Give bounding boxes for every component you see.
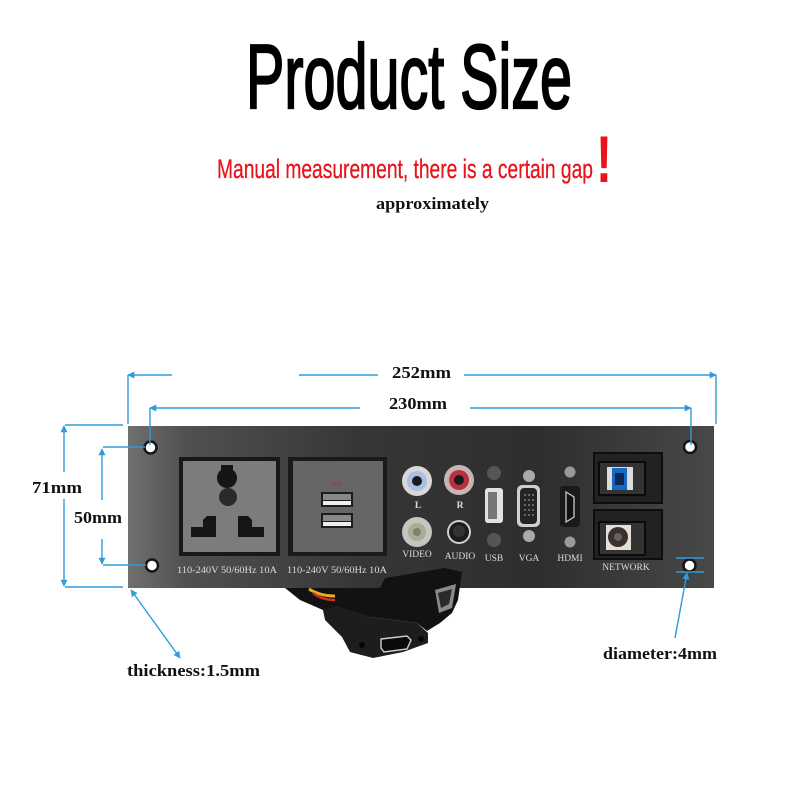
HDMI port bbox=[560, 466, 580, 548]
port labels: VGA bbox=[519, 554, 539, 564]
audio jack bbox=[447, 520, 471, 544]
approximately note: approximately bbox=[376, 194, 490, 213]
RCA audio left bbox=[402, 466, 432, 496]
port labels: HDMI bbox=[557, 554, 583, 564]
port labels: R bbox=[457, 501, 464, 511]
port labels: L bbox=[415, 501, 421, 511]
port labels: AUDIO bbox=[445, 552, 475, 562]
subtitle warning bbox=[217, 122, 612, 196]
port labels bbox=[402, 501, 650, 573]
dimension: hole diameter bbox=[603, 558, 717, 663]
dimension: thickness bbox=[127, 590, 260, 680]
dimension: 71mm height: 71mm bbox=[32, 478, 82, 497]
subtitle warning: ! bbox=[596, 122, 612, 196]
USB port bbox=[485, 466, 503, 547]
dimension: hole diameter: diameter:4mm bbox=[603, 644, 717, 663]
port labels: VIDEO bbox=[402, 550, 432, 560]
universal power socket bbox=[179, 457, 280, 556]
socket voltage labels: 110-240V 50/60Hz 10A bbox=[177, 566, 277, 576]
USB charging module bbox=[288, 457, 387, 556]
socket voltage labels bbox=[177, 566, 387, 576]
dimension: 50mm hole height: 50mm bbox=[74, 508, 122, 527]
dimension: 230mm hole spacing: 230mm bbox=[389, 394, 447, 413]
dimension: 252mm width: 252mm bbox=[392, 363, 451, 382]
RCA audio right bbox=[444, 465, 474, 495]
panel: aluminium faceplate bbox=[128, 426, 714, 588]
USB charging module: USB bbox=[332, 482, 343, 488]
port labels: NETWORK bbox=[602, 563, 650, 573]
cables and rear HDMI connector bbox=[285, 568, 462, 658]
title: Product Size bbox=[246, 27, 572, 128]
subtitle warning: Manual measurement, there is a certain gap bbox=[217, 154, 593, 184]
RCA video bbox=[402, 517, 432, 547]
coaxial network module bbox=[594, 510, 662, 559]
icon: mounting holes bbox=[144, 441, 696, 572]
port labels: USB bbox=[485, 554, 503, 564]
fibre network module bbox=[594, 453, 662, 503]
socket voltage labels: 110-240V 50/60Hz 10A bbox=[287, 566, 387, 576]
dimension: 50mm hole height bbox=[74, 447, 146, 565]
VGA port bbox=[517, 470, 540, 542]
dimension: thickness: thickness:1.5mm bbox=[127, 661, 260, 680]
